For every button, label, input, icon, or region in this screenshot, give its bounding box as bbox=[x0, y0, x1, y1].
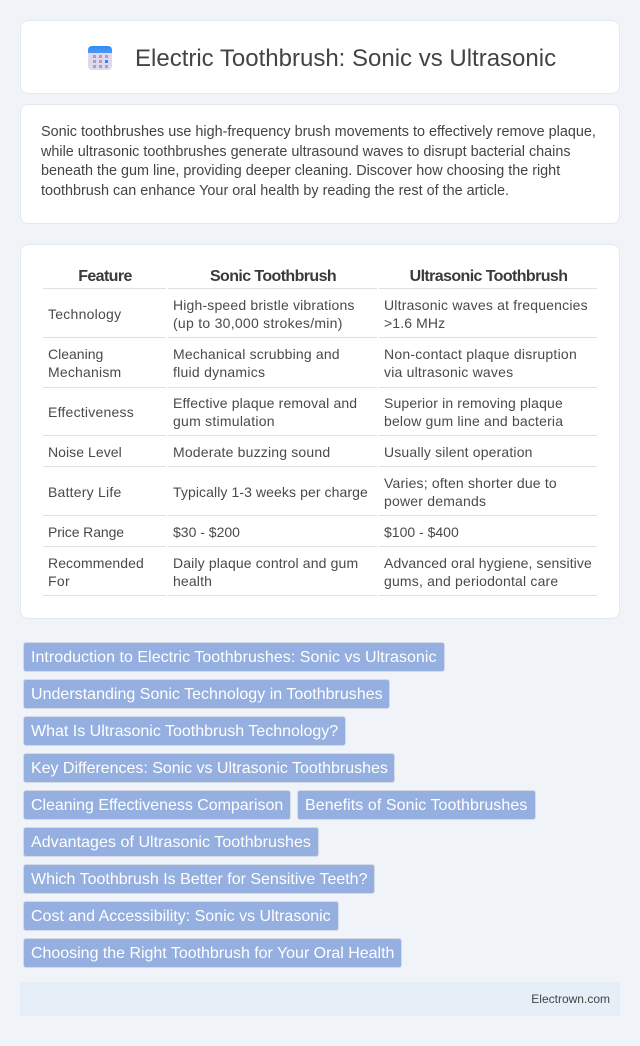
tag: key differences: Key Differences: Sonic vs Ultrasonic Toothbrushes bbox=[31, 760, 388, 777]
tag: cleaning effectiveness bbox=[23, 790, 291, 820]
ultrasonic technology bbox=[384, 297, 588, 331]
tag: benefits of sonic: Benefits of Sonic Toothbrushes bbox=[305, 797, 527, 814]
table header: Feature bbox=[78, 268, 132, 285]
row: effectiveness: Effectiveness bbox=[48, 404, 134, 420]
sonic technology: (up to 30,000 strokes/min) bbox=[173, 315, 343, 331]
ultrasonic mechanism: via ultrasonic waves bbox=[384, 364, 513, 380]
intro text bbox=[41, 124, 596, 199]
row: price range: Price Range bbox=[48, 524, 124, 540]
tag: key differences bbox=[23, 753, 395, 783]
sonic mechanism bbox=[173, 346, 340, 380]
topic links bbox=[23, 642, 536, 968]
tag: choosing bbox=[23, 938, 402, 968]
sonic effectiveness: gum stimulation bbox=[173, 413, 275, 429]
ultrasonic battery: power demands bbox=[384, 493, 486, 509]
tag: advantages of ultrasonic bbox=[23, 827, 319, 857]
sonic recommended: Daily plaque control and gum bbox=[173, 555, 358, 571]
sonic effectiveness bbox=[173, 395, 357, 429]
ultrasonic price: $100 - $400 bbox=[384, 524, 459, 540]
ultrasonic effectiveness: Superior in removing plaque bbox=[384, 395, 563, 411]
footer credit: Electrown.com bbox=[531, 992, 610, 1006]
row: cleaning mechanism bbox=[48, 346, 121, 380]
ultrasonic effectiveness bbox=[384, 395, 564, 429]
table header bbox=[78, 268, 568, 285]
tag: cleaning effectiveness: Cleaning Effectiveness Comparison bbox=[31, 797, 283, 814]
ultrasonic technology: >1.6 MHz bbox=[384, 315, 445, 331]
ultrasonic noise: Usually silent operation bbox=[384, 444, 533, 460]
ultrasonic recommended: Advanced oral hygiene, sensitive bbox=[384, 555, 592, 571]
tag: ultrasonic technology: What Is Ultrasonic Toothbrush Technology? bbox=[31, 723, 338, 740]
title: Electric Toothbrush: Sonic vs Ultrasonic bbox=[135, 45, 556, 72]
ultrasonic recommended bbox=[384, 555, 592, 589]
header panel bbox=[20, 20, 620, 94]
icon: calendar bbox=[88, 46, 112, 70]
tag: sonic technology: Understanding Sonic Technology in Toothbrushes bbox=[31, 686, 383, 703]
tag: advantages of ultrasonic: Advantages of Ultrasonic Toothbrushes bbox=[31, 834, 311, 851]
sonic mechanism: Mechanical scrubbing and bbox=[173, 346, 340, 362]
intro text: toothbrush can enhance Your oral health by reading the rest of the article. bbox=[41, 183, 509, 199]
row: technology: Technology bbox=[48, 306, 121, 322]
table header: Sonic Toothbrush bbox=[210, 268, 336, 285]
sonic noise: Moderate buzzing sound bbox=[173, 444, 330, 460]
tag: benefits of sonic bbox=[297, 790, 536, 820]
row: cleaning mechanism: Cleaning bbox=[48, 346, 103, 362]
ultrasonic battery: Varies; often shorter due to bbox=[384, 475, 557, 491]
sonic price: $30 - $200 bbox=[173, 524, 240, 540]
tag: choosing: Choosing the Right Toothbrush for Your Oral Health bbox=[31, 945, 394, 962]
tag: sensitive teeth bbox=[23, 864, 375, 894]
sonic battery: Typically 1-3 weeks per charge bbox=[173, 484, 368, 500]
table header: Ultrasonic Toothbrush bbox=[410, 268, 567, 285]
sonic technology: High-speed bristle vibrations bbox=[173, 297, 355, 313]
ultrasonic effectiveness: below gum line and bacteria bbox=[384, 413, 563, 429]
tag: sensitive teeth: Which Toothbrush Is Better for Sensitive Teeth? bbox=[31, 871, 367, 888]
sonic effectiveness: Effective plaque removal and bbox=[173, 395, 357, 411]
intro text: while ultrasonic toothbrushes generate ultrasound waves to disrupt bacterial chains bbox=[41, 144, 571, 160]
intro text: Sonic toothbrushes use high-frequency brush movements to effectively remove plaque, bbox=[41, 124, 596, 140]
sonic technology bbox=[173, 297, 355, 331]
row: recommended for bbox=[48, 555, 144, 589]
panel: introduction bbox=[20, 104, 620, 224]
tag: cost: Cost and Accessibility: Sonic vs Ultrasonic bbox=[31, 908, 331, 925]
tag: ultrasonic technology bbox=[23, 716, 346, 746]
ultrasonic mechanism: Non-contact plaque disruption bbox=[384, 346, 577, 362]
ultrasonic battery bbox=[384, 475, 557, 509]
tag: sonic technology bbox=[23, 679, 390, 709]
row: noise level: Noise Level bbox=[48, 444, 122, 460]
tag: introduction: Introduction to Electric Toothbrushes: Sonic vs Ultrasonic bbox=[31, 649, 436, 666]
row: recommended for: Recommended bbox=[48, 555, 144, 571]
sonic recommended bbox=[173, 555, 358, 589]
tag: cost bbox=[23, 901, 339, 931]
row: cleaning mechanism: Mechanism bbox=[48, 364, 121, 380]
panel: comparison table bbox=[20, 244, 620, 619]
intro text: beneath the gum line, providing deeper cleaning. Discover how choosing the right bbox=[41, 163, 560, 179]
tag: introduction bbox=[23, 642, 445, 672]
footer bbox=[20, 982, 620, 1016]
ultrasonic recommended: gums, and periodontal care bbox=[384, 573, 558, 589]
ultrasonic technology: Ultrasonic waves at frequencies bbox=[384, 297, 588, 313]
row: recommended for: For bbox=[48, 573, 70, 589]
row: battery life: Battery Life bbox=[48, 484, 121, 500]
sonic recommended: health bbox=[173, 573, 212, 589]
ultrasonic mechanism bbox=[384, 346, 577, 380]
sonic mechanism: fluid dynamics bbox=[173, 364, 265, 380]
